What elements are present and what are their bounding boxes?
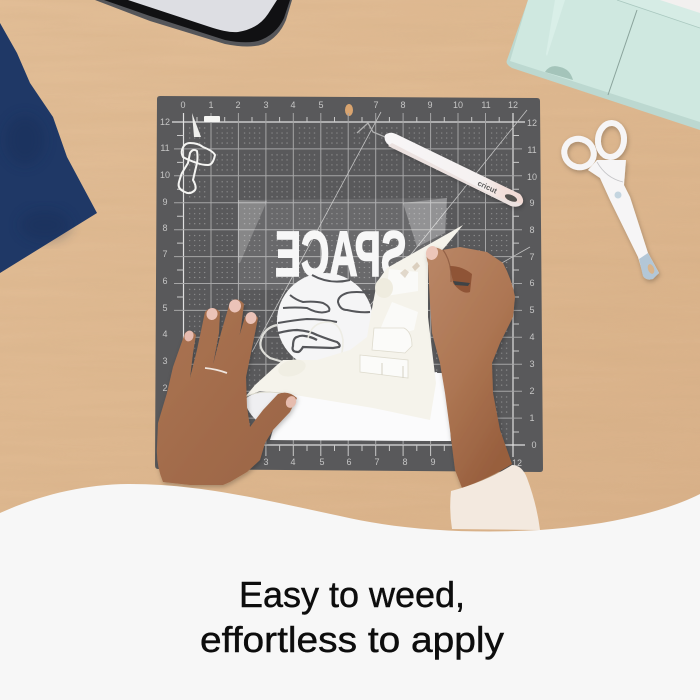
hanging hole — [345, 104, 353, 116]
mat ruler numbers: 12 — [160, 117, 170, 127]
mat ruler numbers: 11 — [527, 145, 537, 155]
mat ruler numbers: 7 — [374, 457, 380, 467]
grid lines — [172, 113, 525, 457]
dot grid — [184, 122, 513, 445]
mat ruler numbers: 4 — [529, 332, 535, 342]
mirrored SPACE lettering: SPACE — [275, 218, 407, 290]
cream sweater cuff — [450, 465, 540, 530]
mat ruler numbers: 3 — [529, 359, 535, 369]
white backing sheet — [244, 372, 451, 441]
mat ruler numbers: 4 — [290, 457, 296, 467]
mat ruler numbers: 7 — [529, 252, 535, 262]
mat ruler numbers: 2 — [235, 100, 241, 110]
mat ruler numbers: 8 — [529, 225, 535, 235]
right hand and forearm — [424, 245, 515, 488]
mat ruler numbers: 2 — [529, 386, 535, 396]
wood table background — [0, 0, 700, 540]
white wave bottom panel — [0, 484, 700, 700]
mat ruler numbers: 6 — [346, 457, 352, 467]
heading — [200, 574, 504, 660]
planet graphic — [260, 273, 373, 369]
scrap weeds on the mat — [179, 113, 220, 193]
mat ruler numbers: 5 — [529, 305, 535, 315]
mat ruler numbers: 5 — [319, 457, 325, 467]
mat ruler numbers: 2 — [162, 383, 168, 393]
mat ruler numbers: 9 — [430, 457, 436, 467]
mat ruler numbers: 9 — [529, 198, 535, 208]
mat ruler numbers: 6 — [162, 276, 168, 286]
mat ruler numbers: 5 — [318, 100, 324, 110]
mat ruler numbers: 10 — [160, 170, 170, 180]
scissors — [559, 122, 659, 280]
mint machine top right — [507, 0, 700, 130]
cutting mat — [155, 96, 543, 472]
mat ruler numbers: 9 — [427, 100, 433, 110]
heat press device top left — [95, 0, 292, 46]
mat ruler numbers: 12 — [527, 118, 537, 128]
mat ruler numbers: 12 — [512, 458, 522, 468]
mat ruler numbers: 3 — [263, 100, 269, 110]
mat ruler numbers: 4 — [290, 100, 296, 110]
mat ruler numbers: 3 — [263, 457, 269, 467]
mat ruler numbers: 10 — [453, 100, 463, 110]
weeding tool — [357, 123, 523, 207]
mat ruler numbers: 5 — [162, 303, 168, 313]
mat ruler numbers: 7 — [373, 100, 379, 110]
mat ruler numbers: 8 — [400, 100, 406, 110]
left hand — [157, 299, 298, 485]
weeding tool: cricut — [476, 179, 499, 196]
transparent carrier film — [238, 198, 447, 290]
mat ruler numbers: 11 — [160, 143, 170, 153]
mat ruler numbers: 7 — [162, 249, 168, 259]
heading: effortless to apply — [200, 619, 504, 660]
ring — [205, 368, 227, 373]
mat ruler numbers: 1 — [208, 100, 214, 110]
mat ruler numbers: 12 — [508, 100, 518, 110]
mat ruler numbers: 0 — [531, 440, 537, 450]
mat ruler numbers — [160, 100, 537, 468]
mat ruler numbers: 0 — [180, 100, 186, 110]
heading: Easy to weed, — [239, 574, 465, 615]
mat ruler numbers: 8 — [162, 223, 168, 233]
mat ruler numbers: 9 — [162, 197, 168, 207]
mat ruler numbers: 4 — [162, 329, 168, 339]
peeled weeding sheet — [245, 225, 463, 420]
navy folded fabric — [0, 23, 97, 273]
mat ruler numbers: 1 — [529, 413, 535, 423]
mat ruler numbers: 6 — [529, 278, 535, 288]
mat ruler numbers: 8 — [402, 457, 408, 467]
mat ruler numbers: 10 — [527, 172, 537, 182]
mat ruler numbers: 11 — [481, 100, 491, 110]
mat ruler numbers: 3 — [162, 356, 168, 366]
